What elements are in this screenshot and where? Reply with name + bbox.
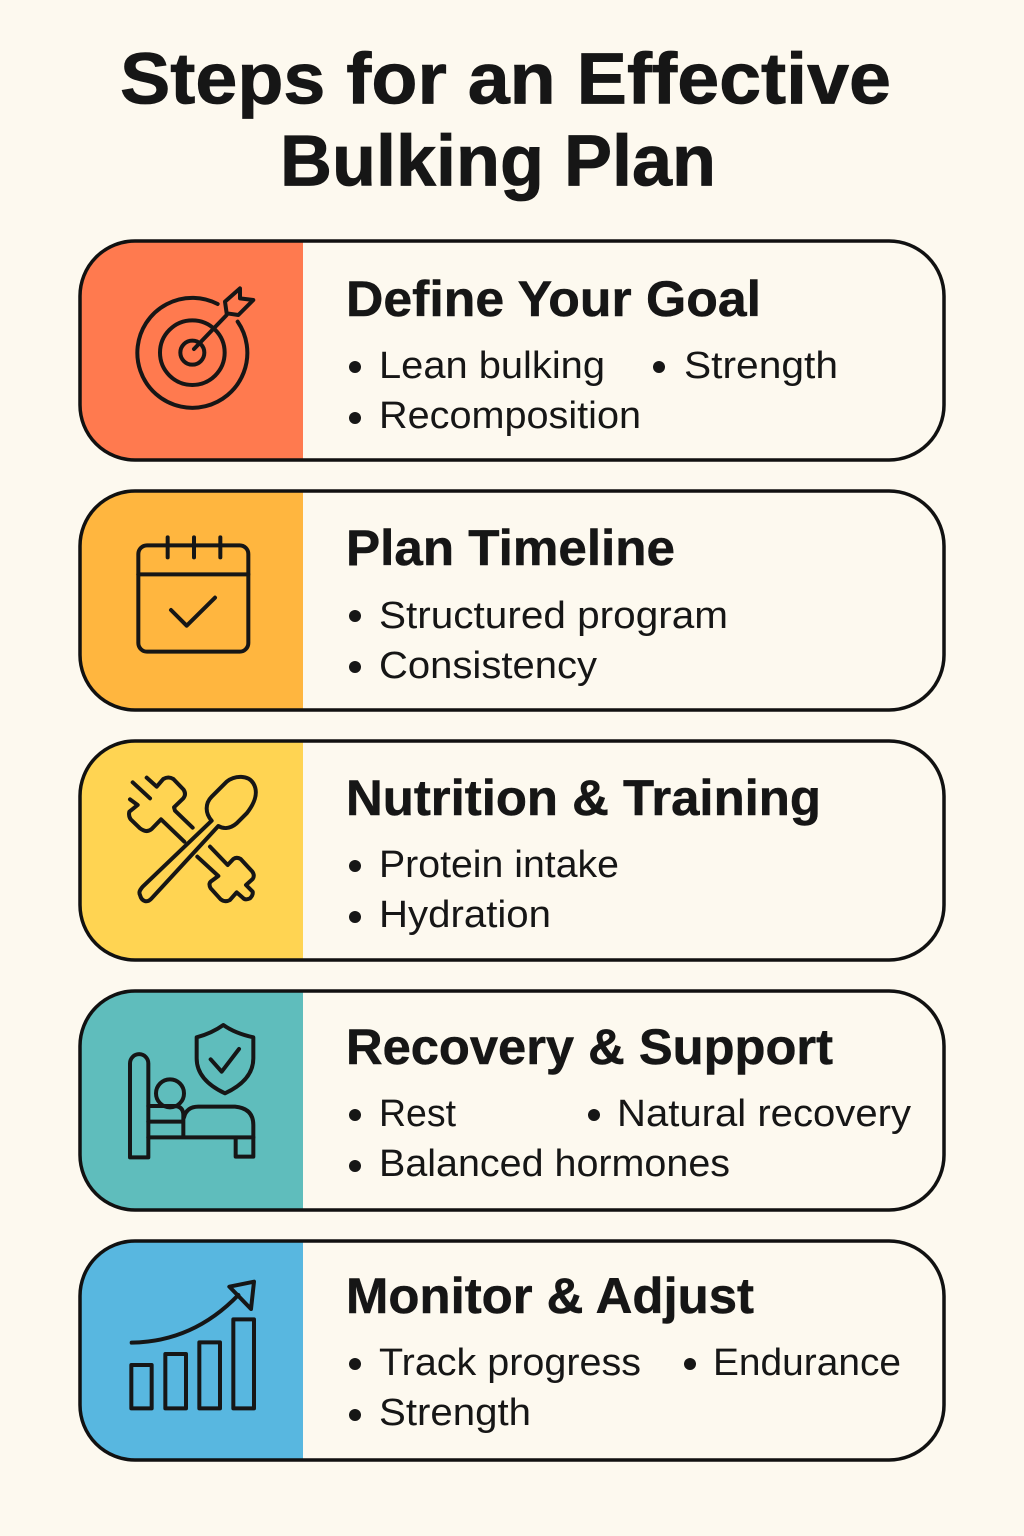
panel: plan timeline [80,491,944,710]
bullet list: Rest [379,1093,456,1135]
icon: calendar with check [138,537,248,652]
title: Steps for an Effective [120,40,891,120]
heading: Plan Timeline [346,520,675,576]
title [120,40,891,202]
icon: bed with shield [130,1025,253,1157]
icon: rising bar chart with arrow [131,1282,254,1408]
heading: Define Your Goal [346,271,761,327]
bullet list [349,345,838,437]
bullet list: Natural recovery [617,1093,911,1135]
colour block: orange [80,241,303,460]
colour block: teal [80,991,303,1210]
icon: target with arrow [137,288,253,408]
bullet list: Strength [379,1392,531,1434]
bullet list: Recomposition [379,395,641,437]
bullet list [349,844,619,936]
panel: nutrition and training [80,741,944,960]
panel: define your goal [80,241,944,460]
heading: Monitor & Adjust [346,1268,754,1324]
heading: Recovery & Support [346,1019,833,1075]
panel: recovery and support [80,991,944,1210]
bullet list: Hydration [379,894,551,936]
bullet list: Lean bulking [379,345,605,387]
panel: monitor and adjust [80,1241,944,1460]
card outline [80,491,944,710]
bullet list: Track progress [379,1342,641,1384]
bullet list: Consistency [379,645,597,687]
card outline [80,1241,944,1460]
bullet list: Protein intake [379,844,619,886]
bullet list [349,1093,911,1185]
colour block: blue [80,1241,303,1460]
bullet list: Endurance [713,1342,901,1384]
bullet list: Strength [684,345,838,387]
colour block: amber [80,491,303,710]
heading: Nutrition & Training [346,770,821,826]
bullet list [349,595,728,687]
icon: crossed spoon and dumbbell [129,777,256,901]
colour block: yellow [80,741,303,960]
card outline [80,241,944,460]
bullet list [349,1342,901,1434]
card outline [80,741,944,960]
title: Bulking Plan [280,122,716,202]
card outline [80,991,944,1210]
bullet list: Balanced hormones [379,1143,730,1185]
bullet list: Structured program [379,595,728,637]
